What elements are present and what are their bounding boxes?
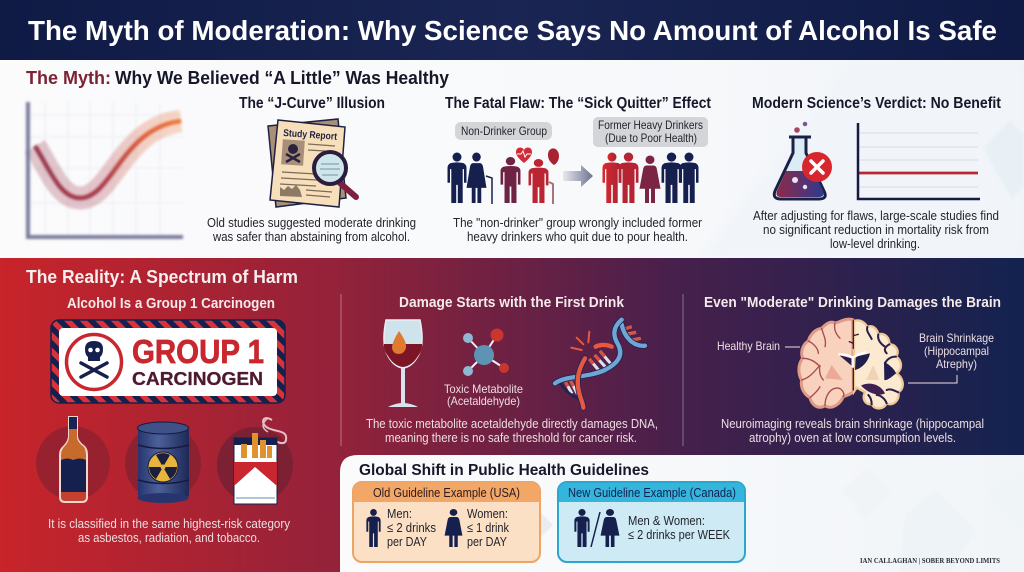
- label: toxic metabolite: Toxic Metabolite: [444, 382, 523, 396]
- icon: molecule: [463, 328, 509, 376]
- chart: flat mortality line: [858, 123, 980, 199]
- chart: blurred J-curve: [28, 102, 183, 237]
- body text: [207, 216, 416, 244]
- panel: sick quitter effect: [445, 95, 711, 244]
- body text: The toxic metabolite acetaldehyde directly damages DNA,: [366, 417, 658, 431]
- body text: no significant reduction in mortality risk from: [763, 223, 989, 237]
- label: brain shrinkage: [908, 331, 994, 383]
- break sparks: [571, 332, 589, 350]
- label: former heavy drinkers: [593, 117, 708, 147]
- section: top background: [0, 60, 1024, 258]
- icon: wine glass: [384, 320, 422, 407]
- body text: as asbestos, radiation, and tobacco.: [78, 531, 260, 545]
- panel: modern science verdict: [752, 95, 1001, 251]
- card: old guideline: per DAY: [387, 534, 427, 549]
- body text: Old studies suggested moderate drinking: [207, 216, 416, 230]
- card: old guideline: ≤ 2 drinks: [387, 520, 436, 535]
- heading: Modern Science’s Verdict: No Benefit: [752, 95, 1001, 112]
- label: brain shrinkage: Brain Shrinkage: [919, 331, 994, 345]
- label: former heavy drinkers: Former Heavy Drinkers: [598, 118, 703, 132]
- header bar: [0, 0, 1024, 60]
- icon: heart with pulse: [516, 148, 532, 163]
- card: new guideline: [558, 482, 745, 562]
- heading: The “J-Curve” Illusion: [239, 95, 385, 112]
- panel: J-curve illusion: [207, 95, 416, 244]
- body text: It is classified in the same highest-risk category: [48, 517, 291, 531]
- heading: Global Shift in Public Health Guidelines: [359, 462, 649, 479]
- label: brain shrinkage: (Hippocampal: [924, 344, 989, 358]
- panel: group 1 carcinogen: [36, 296, 293, 545]
- body text: heavy drinkers who quit due to pour health.: [467, 230, 688, 244]
- icon: radioactive barrel: [125, 422, 201, 503]
- label: former heavy drinkers: (Due to Poor Health): [605, 131, 697, 145]
- label: non-drinker group: Non-Drinker Group: [461, 124, 547, 138]
- icon: study report with magnifier: [268, 119, 356, 207]
- heading: The Fatal Flaw: The “Sick Quitter” Effect: [445, 95, 711, 112]
- panel: global shift in guidelines: [340, 455, 1024, 572]
- body text: [48, 517, 291, 545]
- heading: Even "Moderate" Drinking Damages the Brain: [704, 295, 1001, 311]
- title: The Myth of Moderation: Why Science Says No Amount of Alcohol Is Safe: [28, 15, 997, 46]
- icon: woman: [445, 509, 462, 547]
- card: old guideline: ≤ 1 drink: [467, 520, 509, 535]
- heading: the myth: Why We Believed “A Little” Was Healthy: [115, 68, 449, 88]
- icon: brain cross-section: [799, 319, 903, 408]
- body text: meaning there is no safe threshold for cancer risk.: [385, 431, 637, 445]
- body text: [453, 216, 702, 244]
- warning sign: GROUP 1: [132, 333, 264, 370]
- label: toxic metabolite: (Acetaldehyde): [447, 394, 520, 408]
- body text: [366, 417, 658, 445]
- body text: The "non-drinker" group wrongly included former: [453, 216, 702, 230]
- label: non-drinker group: [455, 122, 552, 140]
- card: new guideline: New Guideline Example (Canada): [568, 485, 736, 500]
- body text: [753, 209, 999, 251]
- panel: damage starts with first drink: [366, 295, 658, 445]
- subheading: Alcohol Is a Group 1 Carcinogen: [67, 296, 275, 312]
- footer credit: IAN CALLAGHAN | SOBER BEYOND LIMITS: [860, 556, 1000, 565]
- card: new guideline: ≤ 2 drinks per WEEK: [628, 527, 730, 542]
- panel: brain damage: [704, 295, 1001, 445]
- warning sign: [51, 320, 285, 403]
- label: toxic metabolite: [444, 382, 523, 408]
- body text: was safer than abstaining from alcohol.: [212, 230, 410, 244]
- card: old guideline: Men:: [387, 506, 412, 521]
- icon: cigarette pack: [217, 418, 293, 504]
- card: old guideline: [353, 482, 540, 562]
- icon: man: [366, 509, 381, 547]
- icon: liquor bottle: [36, 416, 110, 503]
- body text: low-level drinking.: [830, 237, 920, 251]
- card: old guideline: Women:: [467, 506, 508, 521]
- arrow: [563, 165, 593, 187]
- label: healthy brain: Healthy Brain: [717, 339, 780, 353]
- icon: former drinkers people: [602, 152, 698, 203]
- body text: Neuroimaging reveals brain shrinkage (hippocampal: [721, 417, 984, 431]
- icon: anatomical heart: [548, 148, 559, 165]
- heading: Damage Starts with the First Drink: [399, 295, 625, 311]
- icon: DNA helix: [555, 320, 645, 408]
- heading: the reality: The Reality: A Spectrum of Harm: [26, 267, 298, 287]
- chevron: [540, 512, 553, 538]
- body text: atrophy) oven at low consumption levels.: [749, 431, 956, 445]
- body text: After adjusting for flaws, large-scale studies find: [753, 209, 999, 223]
- icon: non-drinker people: [448, 148, 559, 204]
- warning sign: CARCINOGEN: [132, 368, 263, 389]
- icon: man and woman: [574, 509, 619, 547]
- label: brain shrinkage: Atrephy): [936, 357, 977, 371]
- icon: study report with magnifier: Study Report: [283, 128, 338, 143]
- body text: [721, 417, 984, 445]
- icon: flask with X: [774, 122, 832, 199]
- section: bottom background: [0, 258, 1024, 572]
- card: old guideline: per DAY: [467, 534, 507, 549]
- card: new guideline: Men & Women:: [628, 513, 705, 528]
- heading: the myth: The Myth:: [26, 68, 111, 88]
- card: old guideline: Old Guideline Example (USA): [373, 485, 520, 500]
